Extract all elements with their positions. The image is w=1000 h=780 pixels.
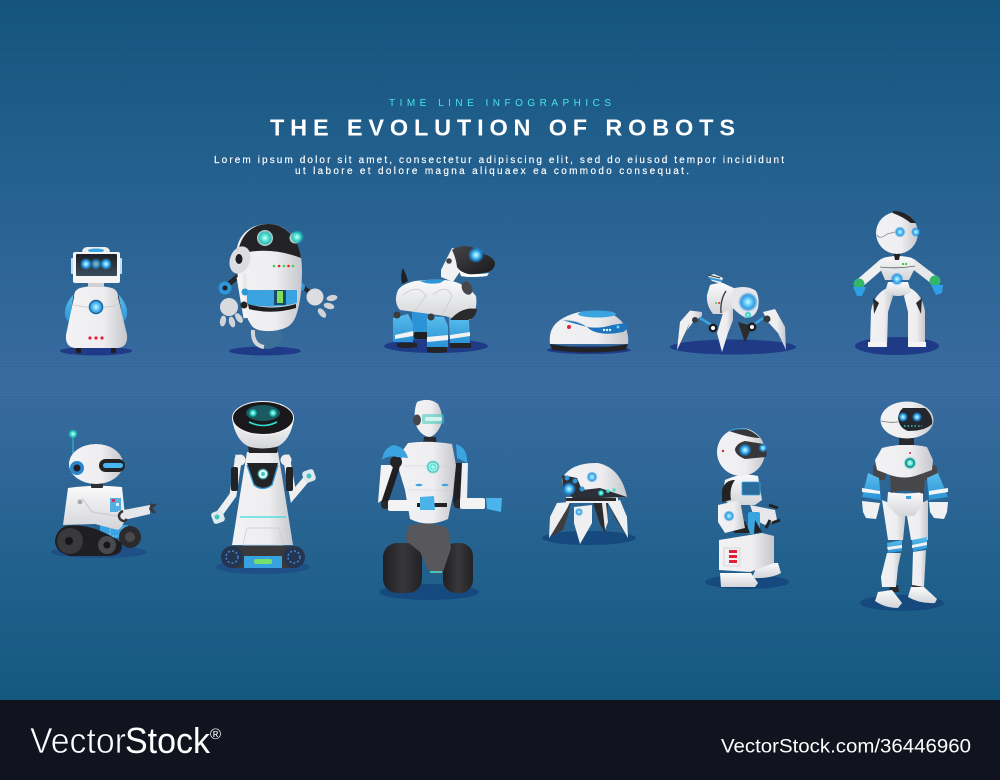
robot 1: screen-head service robot bbox=[60, 247, 132, 356]
footer bar bbox=[0, 700, 1000, 780]
robot 8: bowl-head guide robot bbox=[210, 402, 317, 574]
robot 2: one-wheel capsule robot bbox=[218, 224, 338, 356]
VectorStock logo: Stock bbox=[125, 720, 211, 761]
robot 12: full humanoid robot bbox=[860, 402, 948, 611]
description: Lorem ipsum dolor sit amet, consectetur adipiscing elit, sed do eiusod tempor incididunt bbox=[214, 155, 784, 166]
VectorStock logo: Vector bbox=[30, 720, 126, 761]
header bbox=[214, 98, 784, 177]
image id: VectorStock.com/36446960 bbox=[721, 736, 971, 758]
robot 3: robot dog bbox=[384, 246, 495, 353]
VectorStock logo bbox=[30, 720, 221, 761]
title: THE EVOLUTION OF ROBOTS bbox=[270, 114, 735, 140]
VectorStock logo: ® bbox=[210, 726, 221, 743]
robot 6: round-head humanoid bbox=[853, 212, 943, 355]
eyebrow label: TIME LINE INFOGRAPHICS bbox=[389, 98, 611, 109]
robot 5: spider robot bbox=[670, 274, 796, 354]
description: ut labore et dolore magna aliquaex ea commodo consequat. bbox=[295, 166, 689, 177]
robot 10: crab robot bbox=[542, 463, 636, 545]
robot 11: seated round-head robot bbox=[705, 428, 789, 589]
robot 7: tracked robot bbox=[51, 429, 157, 558]
description bbox=[214, 155, 784, 177]
robot 4: robot vacuum bbox=[547, 310, 631, 354]
robot 9: segway torso robot bbox=[378, 400, 502, 600]
